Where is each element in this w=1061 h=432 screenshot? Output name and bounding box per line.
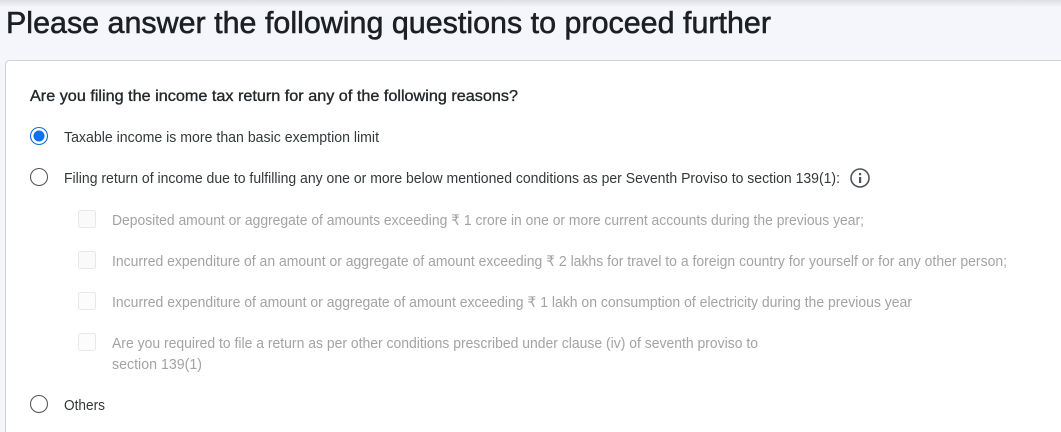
option: others: Others — [64, 398, 105, 414]
title: Please answer the following questions to proceed further — [6, 6, 771, 40]
checkbox: other conditions — [78, 334, 96, 350]
option: taxable income: Taxable income is more than basic exemption limit — [64, 130, 379, 146]
radio: others — [30, 396, 48, 412]
condition: electricity: Incurred expenditure of amount or aggregate of amount exceeding ₹ 1 lakh on consumption of electricity during the previous year — [112, 295, 912, 311]
checkbox: electricity — [78, 292, 96, 310]
radio: seventh proviso — [30, 168, 48, 186]
condition: foreign travel: Incurred expenditure of an amount or aggregate of amount exceeding ₹ 2 lakhs for travel to a foreign country for yourself or for any other person; — [112, 254, 1007, 270]
icon: info — [851, 169, 869, 187]
condition: other conditions: Are you required to file a return as per other conditions prescribed under clause (iv) of seventh proviso to — [112, 336, 758, 352]
condition: other conditions — [112, 336, 758, 373]
condition: other conditions: section 139(1) — [112, 357, 202, 373]
condition: current accounts: Deposited amount or aggregate of amounts exceeding ₹ 1 crore in one or more current accounts during the previous year; — [112, 213, 864, 229]
option: seventh proviso: Filing return of income due to fulfilling any one or more below mentioned conditions as per Seventh Proviso to section 139(1): — [64, 171, 840, 187]
checkbox: foreign travel — [78, 252, 96, 268]
checkbox: current accounts — [78, 210, 96, 228]
radio: selected taxable income — [30, 128, 48, 144]
question heading: Are you filing the income tax return for any of the following reasons? — [30, 88, 518, 105]
